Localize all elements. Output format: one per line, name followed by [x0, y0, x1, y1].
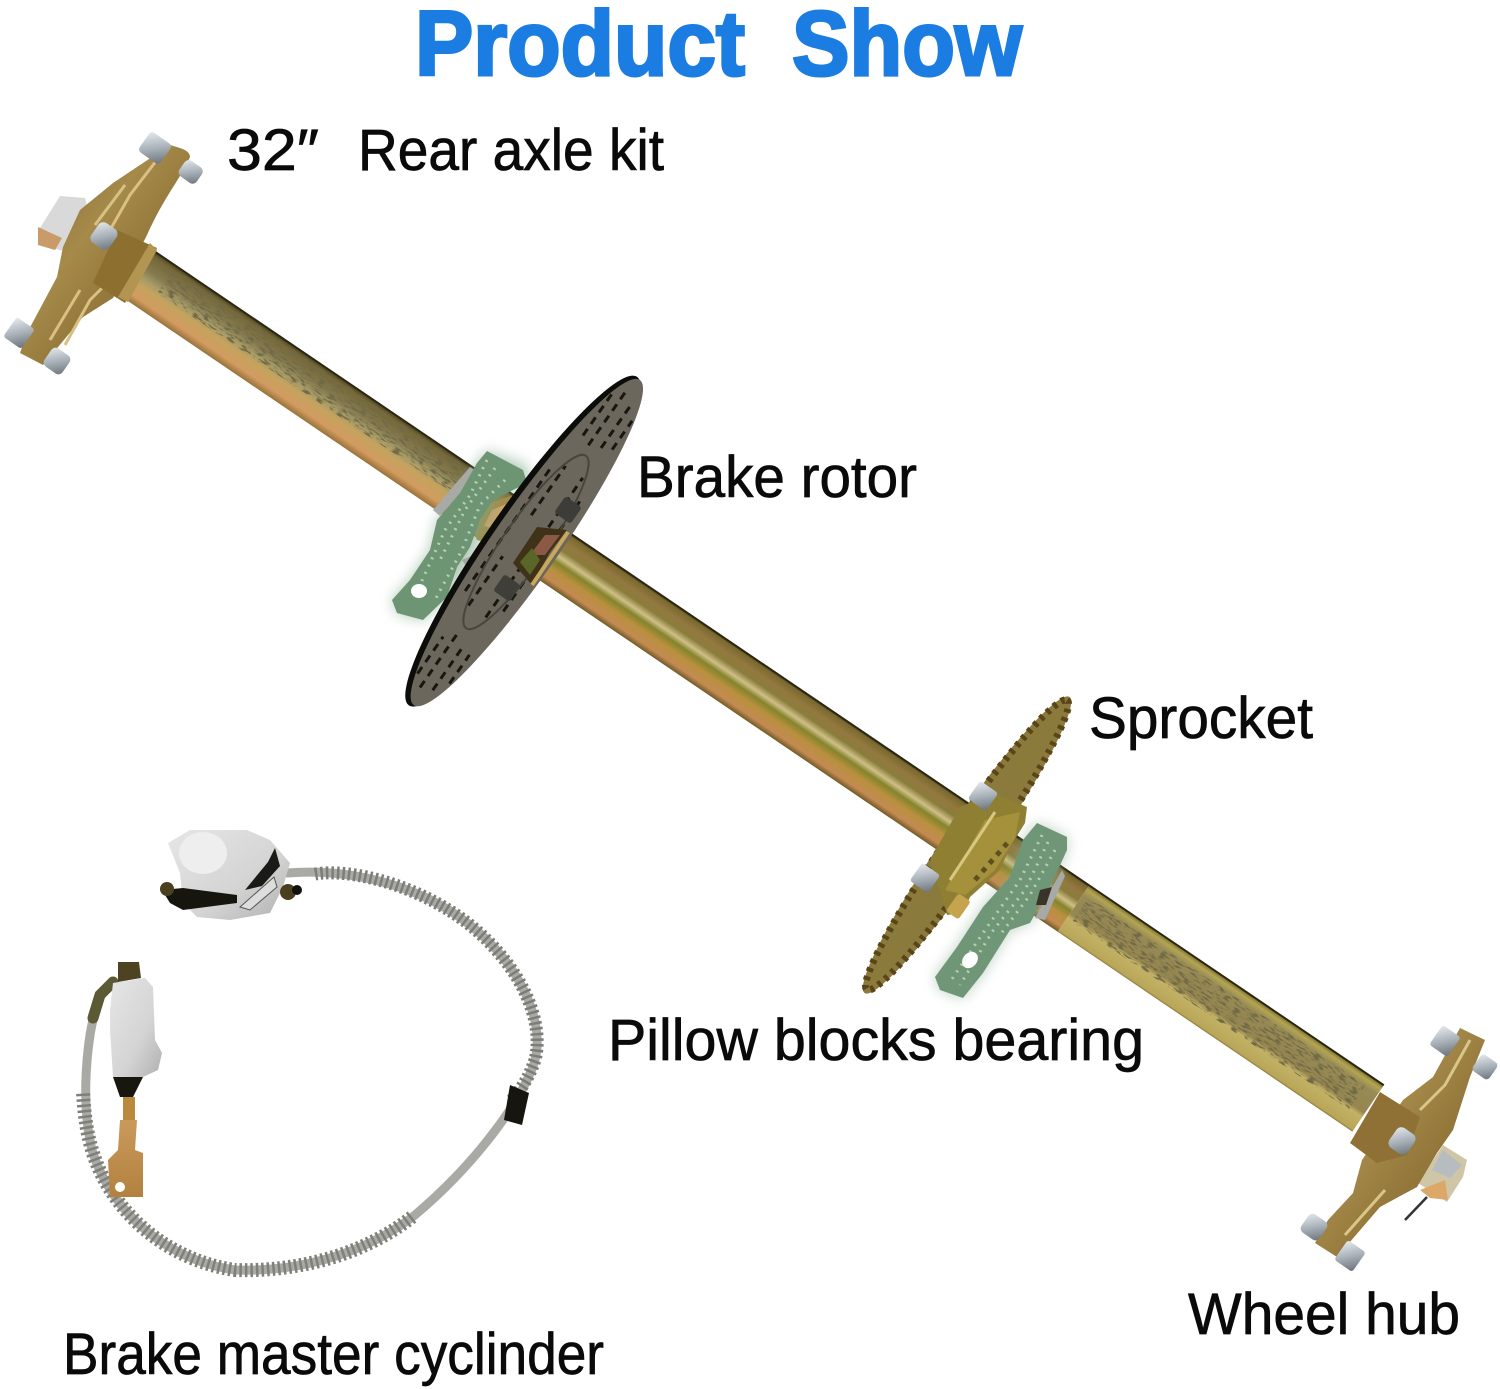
rubber grommet — [504, 1085, 529, 1125]
wheel hub: right — [1299, 1025, 1499, 1272]
label: pillow blocks bearing: Pillow blocks bearing — [608, 1008, 1144, 1073]
axle shaft — [123, 251, 1384, 1132]
label: 32 inch rear axle kit: 32″ — [227, 118, 319, 183]
title — [415, 0, 1022, 95]
brake hose — [83, 872, 537, 1270]
wheel hub: left — [3, 131, 205, 376]
brake caliper — [160, 830, 302, 920]
master cylinder — [108, 962, 162, 1197]
label: brake rotor: Brake rotor — [637, 445, 917, 510]
label: wheel hub: Wheel hub — [1188, 1282, 1460, 1347]
pillow block bearing: right — [935, 823, 1067, 998]
shaft segment behind rotor — [473, 493, 525, 547]
label: 32 inch rear axle kit: Rear axle kit — [358, 118, 664, 183]
pillow block bearing: left — [392, 451, 530, 620]
rotor hub and tube collar — [493, 496, 582, 602]
brake assembly — [83, 830, 537, 1270]
brake rotor — [380, 357, 667, 726]
label: 32 inch rear axle kit — [227, 118, 664, 183]
sprocket — [846, 684, 1088, 1006]
label: brake master cylinder: Brake master cyclinder — [63, 1322, 604, 1387]
label: sprocket: Sprocket — [1089, 686, 1313, 751]
